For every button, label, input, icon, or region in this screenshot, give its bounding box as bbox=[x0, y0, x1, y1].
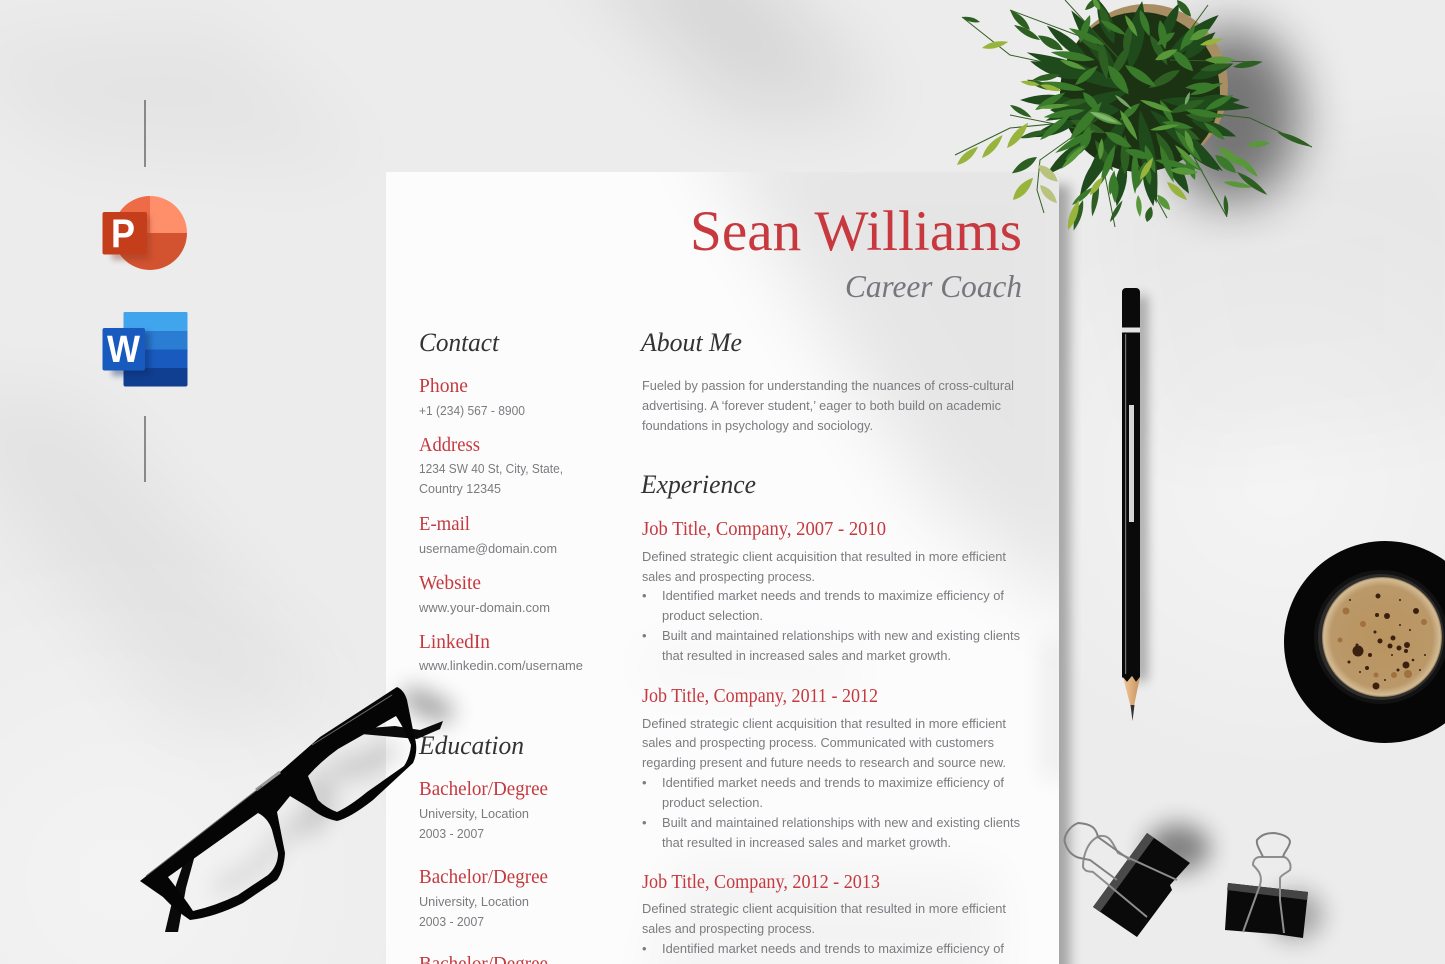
panel: experience bbox=[640, 470, 1020, 956]
panel: about me: Fueled by passion for understanding the nuances of cross-cultural bbox=[642, 378, 1014, 393]
job entry three: sales and prospecting process. bbox=[642, 921, 815, 936]
temple arm upper bbox=[345, 721, 443, 739]
panel: experience: Experience bbox=[640, 470, 756, 499]
job entry one: product selection. bbox=[662, 608, 763, 623]
coffee cup bbox=[1284, 541, 1445, 743]
job entry two: Built and maintained relationships with new and existing clients bbox=[662, 815, 1020, 830]
job entry one: sales and prospecting process. bbox=[642, 569, 815, 584]
job entry two: Job Title, Company, 2011 - 2012 bbox=[642, 686, 878, 707]
panel: contact column: Country 12345 bbox=[419, 481, 501, 496]
job entry two: that resulted in increased sales and market growth. bbox=[662, 835, 951, 850]
temple arm lower bbox=[165, 850, 195, 932]
job entry two: Identified market needs and trends to maximize efficiency of bbox=[662, 775, 1004, 790]
job entry three: • bbox=[642, 941, 647, 956]
binder clip right bbox=[1225, 833, 1323, 940]
job entry three bbox=[642, 872, 1006, 956]
panel: education column: Education bbox=[418, 731, 524, 760]
panel: contact column: 1234 SW 40 St, City, State, bbox=[419, 461, 563, 476]
icon: PowerPoint: P bbox=[111, 212, 135, 256]
icon: Word: W bbox=[107, 329, 140, 371]
panel: education column bbox=[418, 731, 548, 964]
panel: contact column: Phone bbox=[419, 376, 468, 397]
plant in basket bbox=[955, 0, 1313, 232]
panel: contact column: E-mail bbox=[419, 514, 471, 535]
panel: contact column: LinkedIn bbox=[419, 632, 490, 653]
left vertical rule bottom bbox=[144, 416, 146, 482]
bridge highlight bbox=[256, 772, 280, 790]
icon: PowerPoint bbox=[102, 196, 187, 270]
panel: contact column: Contact bbox=[419, 328, 500, 357]
pencil bbox=[1122, 288, 1146, 721]
panel: about me: foundations in psychology and sociology. bbox=[642, 418, 873, 433]
job entry two: • bbox=[642, 815, 647, 830]
job entry one: • bbox=[642, 628, 647, 643]
panel: education column: University, Location bbox=[419, 806, 529, 821]
top edge highlight bbox=[146, 695, 392, 876]
panel: contact column: Address bbox=[419, 435, 480, 456]
job title heading: Career Coach bbox=[845, 268, 1022, 304]
job entry one: Defined strategic client acquisition that resulted in more efficient bbox=[642, 549, 1006, 564]
left vertical rule top bbox=[144, 100, 146, 167]
job entry one: Job Title, Company, 2007 - 2010 bbox=[642, 519, 886, 540]
panel: contact column: +1 (234) 567 - 8900 bbox=[419, 403, 525, 418]
eyeglasses bbox=[140, 687, 450, 932]
panel: contact column bbox=[418, 328, 583, 673]
job entry one: Built and maintained relationships with new and existing clients bbox=[662, 628, 1020, 643]
job entry one bbox=[642, 519, 1020, 663]
panel: about me bbox=[639, 328, 1014, 433]
binder clip left bbox=[1065, 823, 1210, 937]
name heading: Sean Williams bbox=[690, 200, 1022, 263]
job entry two bbox=[642, 686, 1020, 850]
job entry one: that resulted in increased sales and market growth. bbox=[662, 648, 951, 663]
job entry two: Defined strategic client acquisition that resulted in more efficient bbox=[642, 716, 1006, 731]
job entry two: product selection. bbox=[662, 795, 763, 810]
shadow under resume sheet bbox=[1046, 185, 1070, 964]
icon: Word bbox=[102, 312, 188, 386]
job entry two: • bbox=[642, 775, 647, 790]
job entry two: regarding present and future needs to research and source new. bbox=[642, 755, 1006, 770]
panel: about me: About Me bbox=[639, 328, 742, 357]
panel: education column: 2003 - 2007 bbox=[419, 914, 484, 929]
panel: education column: Bachelor/Degree bbox=[419, 779, 548, 800]
job entry three: Identified market needs and trends to maximize efficiency of bbox=[662, 941, 1004, 956]
panel: about me: advertising. A ‘forever student,’ eager to both build on academic bbox=[642, 398, 1001, 413]
panel: education column: Bachelor/Degree bbox=[419, 867, 548, 888]
job entry one: • bbox=[642, 588, 647, 603]
job entry two: sales and prospecting process. Communicated with customers bbox=[642, 735, 994, 750]
panel: education column: University, Location bbox=[419, 894, 529, 909]
job entry one: Identified market needs and trends to maximize efficiency of bbox=[662, 588, 1004, 603]
frame front with two lenses bbox=[140, 687, 416, 920]
job entry three: Defined strategic client acquisition that resulted in more efficient bbox=[642, 901, 1006, 916]
panel: contact column: www.linkedin.com/username bbox=[418, 658, 583, 673]
panel: contact column: username@domain.com bbox=[419, 541, 557, 556]
panel: contact column: www.your-domain.com bbox=[418, 600, 550, 615]
job entry three: Job Title, Company, 2012 - 2013 bbox=[642, 872, 880, 893]
panel: resume sheet bbox=[386, 172, 1059, 964]
panel: education column: 2003 - 2007 bbox=[419, 826, 484, 841]
panel: contact column: Website bbox=[419, 573, 481, 594]
